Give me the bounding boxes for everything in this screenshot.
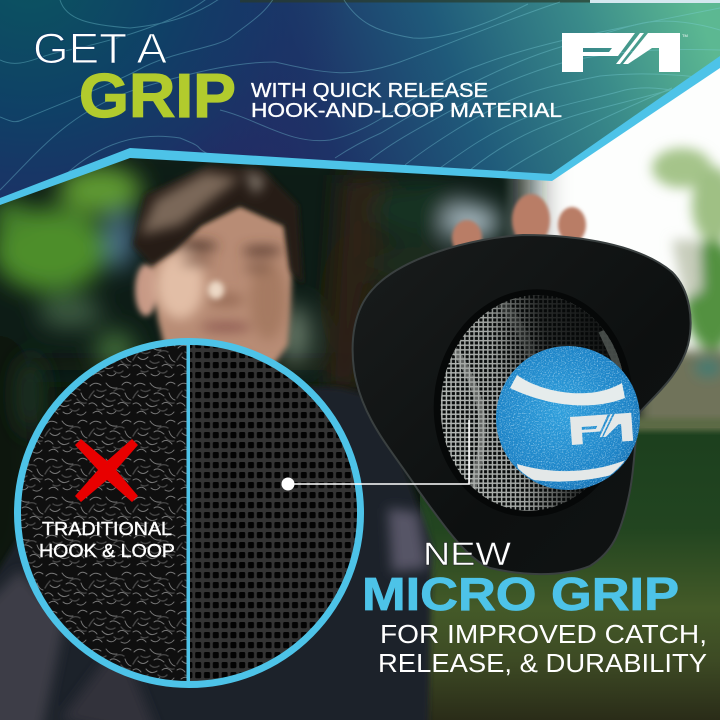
mitt recess bbox=[419, 276, 647, 530]
grass bbox=[420, 428, 720, 720]
logo: P1 bbox=[562, 33, 688, 72]
hair bbox=[133, 165, 303, 285]
icon: fingers bbox=[452, 194, 586, 256]
tennis ball bbox=[496, 346, 640, 490]
left trees bbox=[0, 140, 530, 610]
subtitle: quick release bbox=[251, 80, 562, 122]
NEW: NEW bbox=[423, 536, 512, 572]
text block: new micro grip bbox=[362, 536, 707, 678]
label: traditional hook and loop: TRADITIONAL bbox=[42, 518, 172, 539]
contour lines bbox=[0, 0, 720, 190]
logo: P1: TM bbox=[682, 33, 688, 38]
subtitle: quick release: HOOK-AND-LOOP MATERIAL bbox=[251, 100, 562, 122]
right trees bbox=[640, 148, 720, 435]
ball logo bbox=[570, 413, 633, 445]
micro grip mesh bbox=[440, 295, 622, 511]
subtitle: quick release: WITH QUICK RELEASE bbox=[251, 80, 488, 102]
mitt body bbox=[353, 235, 691, 574]
right half: micro grip mesh bbox=[190, 345, 357, 681]
banner cyan edge bbox=[0, 56, 720, 205]
circle ring and divider bbox=[18, 342, 360, 684]
MICRO GRIP: MICRO GRIP bbox=[362, 568, 679, 620]
label: traditional hook and loop: HOOK & LOOP bbox=[39, 540, 175, 561]
title: GET A: GET A bbox=[33, 25, 167, 73]
neck and face bbox=[135, 205, 292, 370]
benefits: FOR IMPROVED CATCH, bbox=[380, 621, 707, 649]
sky bbox=[505, 0, 720, 395]
left half: traditional hook and loop bbox=[15, 340, 368, 690]
person bbox=[0, 165, 432, 720]
benefits bbox=[378, 621, 707, 678]
callout pointer line bbox=[282, 420, 469, 490]
callout: hook and loop comparison circle bbox=[15, 340, 368, 690]
nose highlight bbox=[208, 281, 224, 299]
banner background bbox=[0, 0, 720, 198]
icon: red X bbox=[75, 439, 138, 502]
facial shading bbox=[156, 241, 286, 340]
grass edge with background bbox=[600, 418, 720, 431]
title: GRIP: GRIP bbox=[79, 62, 236, 131]
label: traditional hook and loop bbox=[39, 518, 175, 561]
banner bbox=[0, 0, 720, 205]
hand pad mitt with ball bbox=[353, 235, 691, 574]
shirt bbox=[0, 380, 432, 720]
benefits: RELEASE, & DURABILITY bbox=[378, 650, 707, 678]
